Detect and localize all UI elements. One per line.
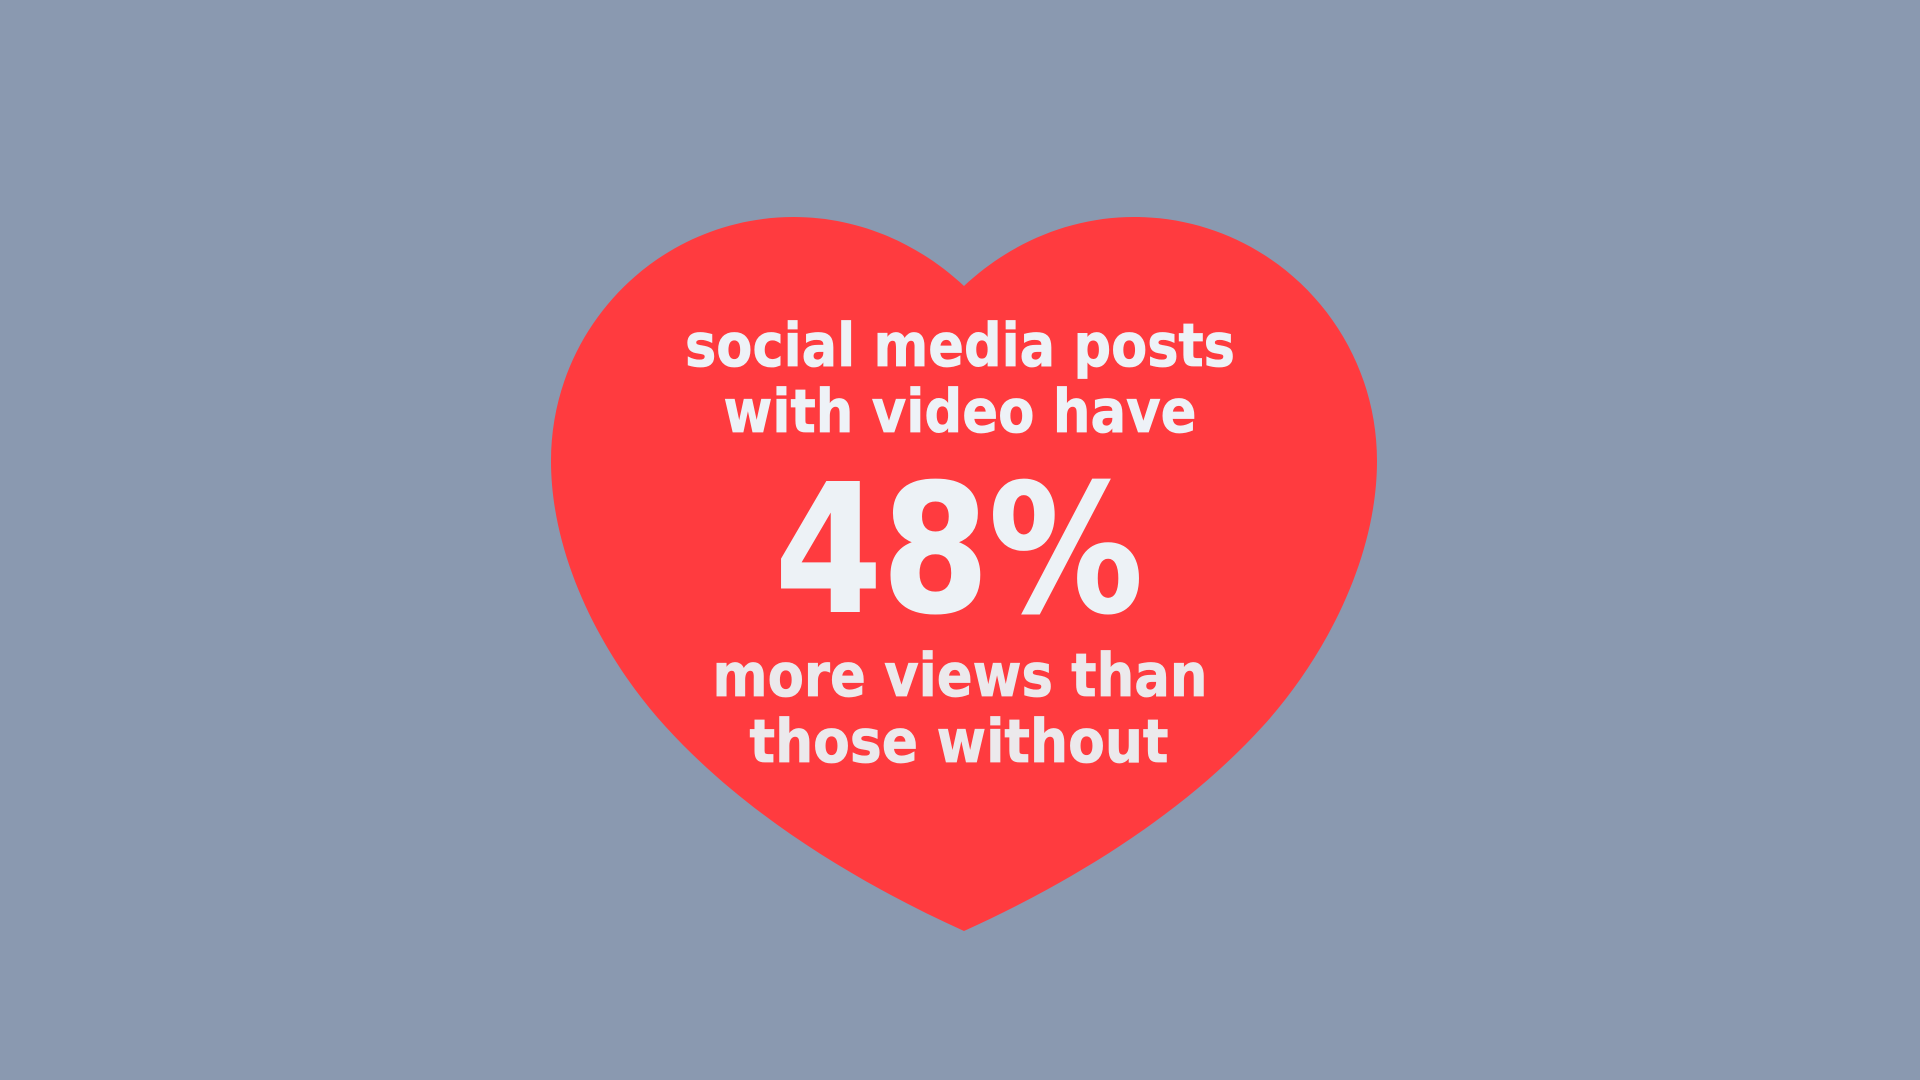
text block: intro: with video have — [724, 377, 1196, 447]
icon: red heart — [551, 217, 1377, 931]
text block: conclusion: more views than — [712, 641, 1208, 711]
text block: intro — [685, 311, 1235, 447]
text block: conclusion — [712, 641, 1208, 777]
big number: 48%: 48% — [775, 447, 1143, 653]
text block: intro: social media posts — [685, 311, 1235, 381]
text block: conclusion: those without — [750, 707, 1168, 777]
